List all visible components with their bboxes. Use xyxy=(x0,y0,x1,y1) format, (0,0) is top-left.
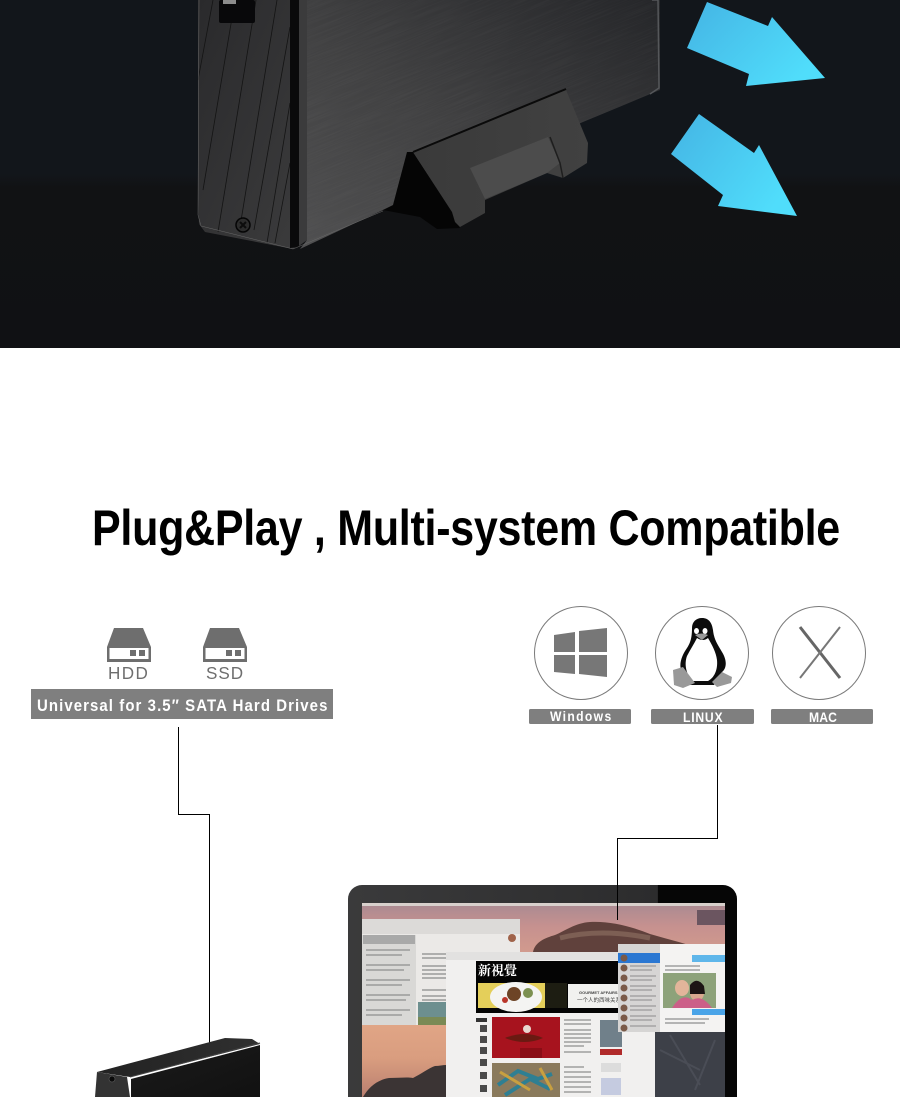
title: Plug&Play , Multi-system Compatible xyxy=(92,500,840,556)
label: Linux: LINUX xyxy=(683,709,723,725)
icon: box screw xyxy=(109,1076,115,1082)
browser window: 一个人的西味关系 xyxy=(577,996,622,1004)
browser window: 新視覺 xyxy=(478,963,517,978)
connector: systems to laptop xyxy=(618,725,718,920)
label: Mac xyxy=(771,709,873,725)
arrow: airflow lower xyxy=(671,114,797,216)
panel: dark product photo xyxy=(0,0,900,348)
stand xyxy=(383,89,588,229)
label: Mac: MAC xyxy=(809,709,837,725)
browser window xyxy=(446,952,655,1097)
connector: drives to enclosure xyxy=(178,727,210,1045)
label bar: universal drives xyxy=(31,689,333,719)
panel: supported drives xyxy=(31,628,333,719)
icon: SSD: SSD xyxy=(206,663,243,683)
icon: SSD xyxy=(203,628,247,683)
wallpaper mountains xyxy=(363,922,726,1097)
icon: HDD: HDD xyxy=(108,663,148,683)
laptop xyxy=(348,885,737,1097)
label: Linux xyxy=(651,709,754,725)
panel: supported systems xyxy=(529,606,873,725)
icon: power switch xyxy=(219,0,255,23)
arrow: airflow upper xyxy=(687,2,825,86)
label: Windows: Windows xyxy=(550,708,611,724)
icon: Linux penguin xyxy=(656,606,748,700)
icon: Mac X xyxy=(772,606,866,700)
laptop screen xyxy=(362,903,726,1097)
enclosure: hard drive case xyxy=(198,0,660,250)
label bar: universal drives: Universal for 3.5″ SATA Hard Drives xyxy=(37,697,327,715)
enclosure: drive box in use xyxy=(95,1038,260,1097)
icon: Windows xyxy=(534,606,628,700)
icon: HDD xyxy=(107,628,151,683)
browser window: GOURMET AFFAIRS xyxy=(579,990,618,995)
icon: screw xyxy=(236,218,250,232)
mail window xyxy=(362,919,520,1025)
messages window xyxy=(618,944,726,1032)
label: Windows xyxy=(529,708,631,724)
